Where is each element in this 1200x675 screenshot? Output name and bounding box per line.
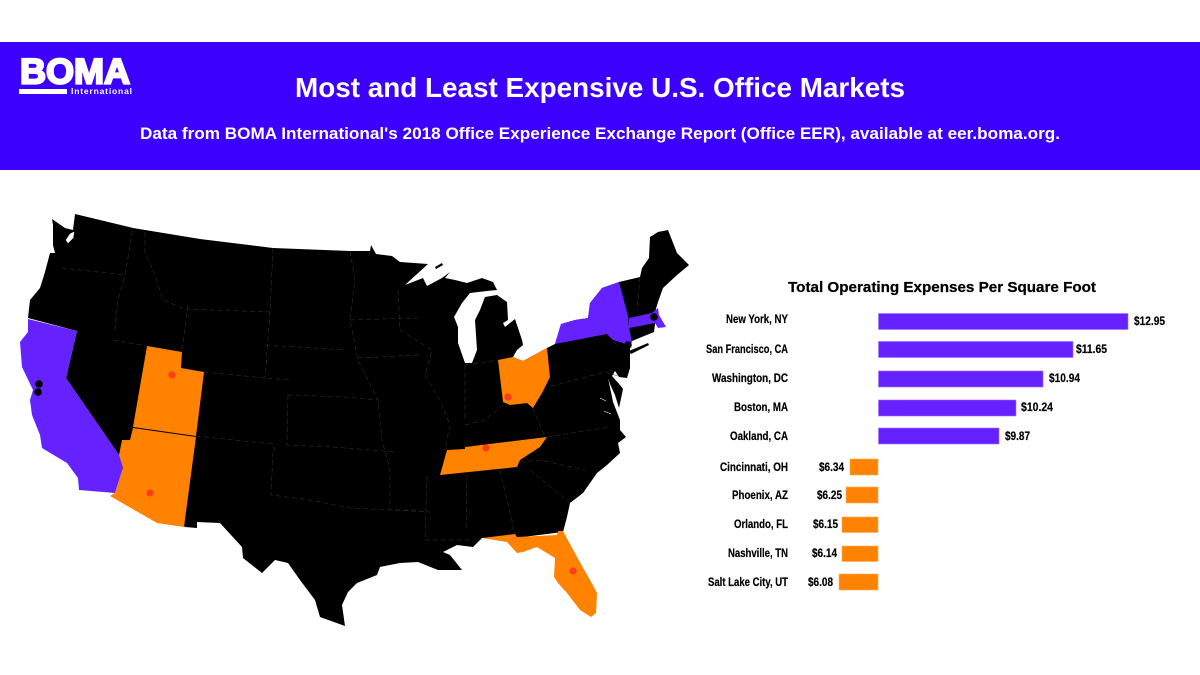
row: San Francisco: San Francisco, CA xyxy=(706,342,788,356)
state: Utah xyxy=(133,346,204,436)
state: New York xyxy=(555,282,632,349)
logo: BOMA International: BOMA xyxy=(20,52,130,92)
state: Massachusetts xyxy=(629,308,666,328)
row: Oakland xyxy=(730,428,1030,444)
markers: most expensive cities xyxy=(34,313,658,396)
row: Phoenix: $6.25 xyxy=(817,488,842,502)
row: Boston: $10.24 xyxy=(1021,400,1053,414)
row: Cincinnati: Cincinnati, OH xyxy=(720,460,788,474)
row: San Francisco xyxy=(706,342,1107,358)
row: New York: New York, NY xyxy=(726,312,788,326)
row: San Francisco: $11.65 xyxy=(1076,342,1107,356)
row: Salt Lake City xyxy=(708,574,878,590)
row: Boston: Boston, MA xyxy=(734,400,788,414)
row: Cincinnati: $6.34 xyxy=(819,460,844,474)
state: Arizona xyxy=(110,428,196,527)
row: Oakland: $9.87 xyxy=(1005,429,1030,443)
row: Phoenix xyxy=(732,487,878,503)
row: Orlando: Orlando, FL xyxy=(734,517,788,531)
state: Tennessee xyxy=(440,437,547,475)
state: Ohio xyxy=(498,348,550,408)
row: Washington: $10.94 xyxy=(1049,371,1080,385)
row: New York: $12.95 xyxy=(1134,314,1165,328)
state: California xyxy=(20,319,123,493)
row: Nashville: $6.14 xyxy=(812,546,837,560)
row: Washington: Washington, DC xyxy=(712,371,788,385)
row: Nashville: Nashville, TN xyxy=(728,546,788,560)
row: Cincinnati xyxy=(720,459,878,475)
subtitle: Data from BOMA International's 2018 Office Experience Exchange Report (Office EER), available at eer.boma.org. xyxy=(140,124,1060,143)
markers: least expensive cities xyxy=(146,371,577,575)
Puget Sound and rivers xyxy=(66,232,611,414)
title: Most and Least Expensive U.S. Office Markets xyxy=(295,72,905,103)
row: Boston xyxy=(734,400,1053,416)
state border lines xyxy=(62,228,640,540)
bar chart: total operating expenses xyxy=(706,280,1165,590)
contiguous states base xyxy=(28,214,689,626)
row: Washington xyxy=(712,371,1080,387)
state: Florida xyxy=(482,531,597,617)
row: Oakland: Oakland, CA xyxy=(730,429,788,443)
header banner xyxy=(0,42,1200,170)
row: Salt Lake City: $6.08 xyxy=(808,575,833,589)
row: Orlando: $6.15 xyxy=(813,517,838,531)
logo: BOMA International: International xyxy=(71,86,132,96)
chart title: Total Operating Expenses Per Square Foot xyxy=(788,280,1096,296)
row: New York xyxy=(726,312,1165,330)
row: Salt Lake City: Salt Lake City, UT xyxy=(708,575,789,589)
row: Orlando xyxy=(734,517,878,532)
row: Nashville xyxy=(728,546,878,562)
Long Island and islands xyxy=(435,263,649,354)
map of the United States xyxy=(20,214,689,626)
row: Phoenix: Phoenix, AZ xyxy=(732,488,788,502)
